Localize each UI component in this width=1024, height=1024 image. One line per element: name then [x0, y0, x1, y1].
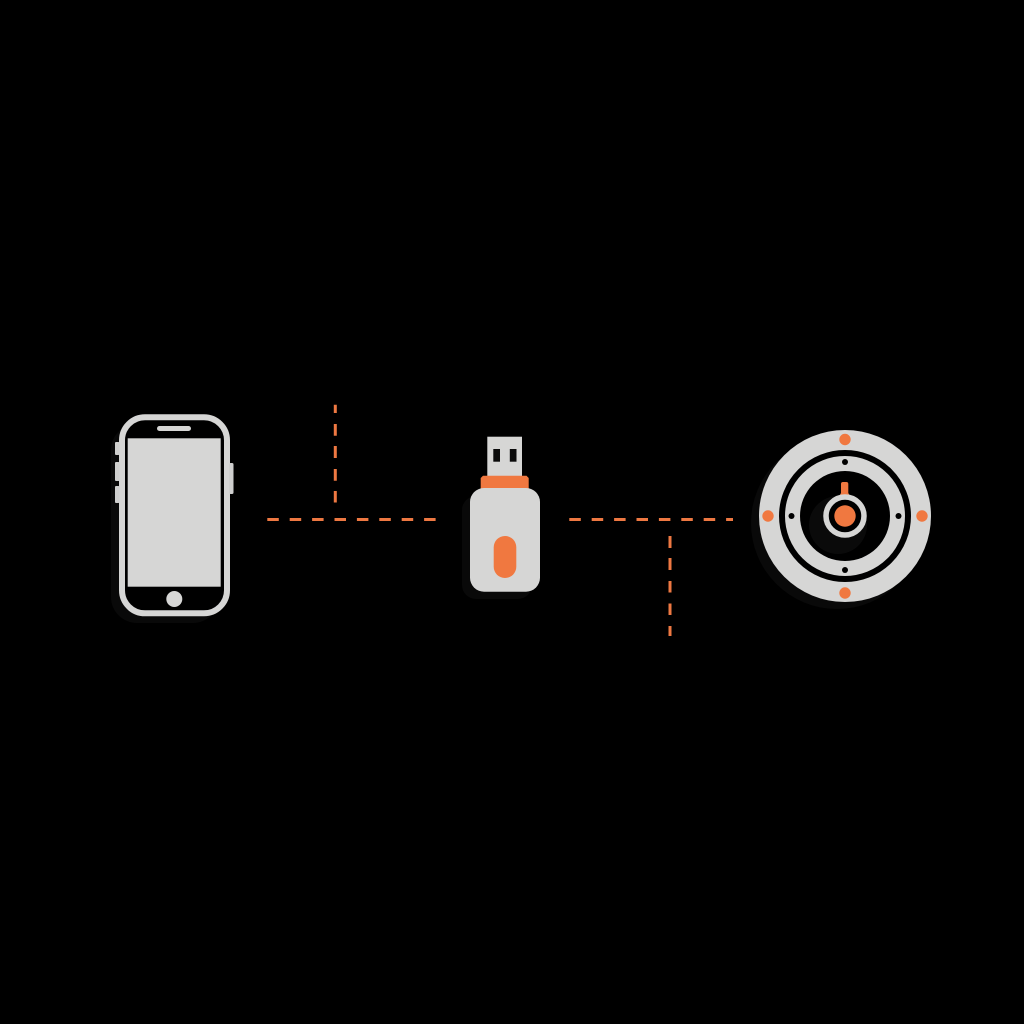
icon: smartphone: [111, 417, 234, 623]
icon: circular dial: [751, 430, 931, 609]
arrow: connector from USB drive to dial: [569, 520, 733, 636]
icon: USB drive: [462, 437, 540, 599]
arrow: connector from phone to USB drive: [267, 405, 436, 520]
